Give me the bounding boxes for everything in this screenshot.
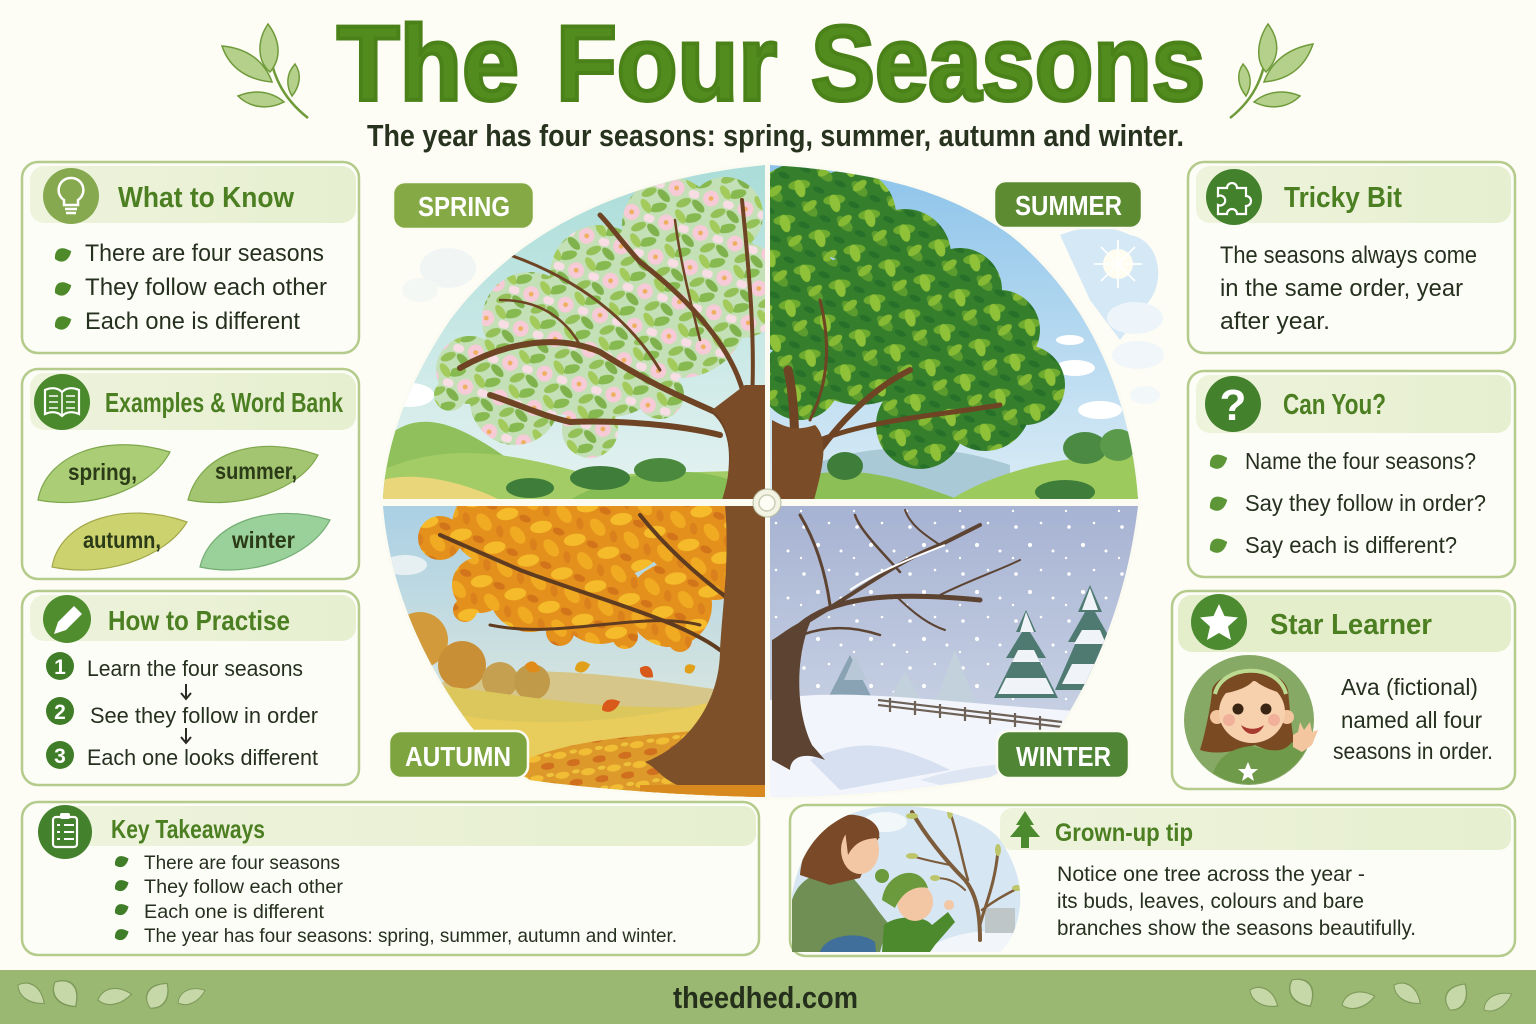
footer leaves right	[1247, 973, 1515, 1015]
label: winter: WINTER	[1016, 741, 1111, 772]
leaf pile	[524, 731, 760, 797]
icon: tree	[1010, 811, 1040, 848]
icon: right leaf sprig	[1230, 24, 1313, 118]
avatar: Ava	[1184, 655, 1318, 790]
word leaf: spring: spring,	[68, 459, 137, 485]
quadrant: autumn	[383, 506, 765, 797]
autumn canopy	[418, 506, 727, 652]
panel: can you	[1188, 371, 1515, 577]
icon: light bulb	[43, 168, 99, 224]
list: There are four seasons	[144, 853, 340, 874]
heading: How to Practise	[108, 605, 290, 636]
list	[52, 240, 327, 335]
decorative clouds and sun beside the seasons circle	[402, 228, 1164, 404]
list	[112, 853, 677, 947]
word leaf: spring	[38, 445, 170, 503]
icon: clipboard checklist	[38, 805, 92, 859]
list: Name the four seasons?	[1245, 448, 1476, 474]
quadrant: summer	[770, 165, 1138, 499]
heading: Tricky Bit	[1284, 182, 1402, 214]
footer band	[0, 970, 1536, 1024]
icon: question mark: ?	[1220, 381, 1246, 430]
white outline of wheel	[380, 162, 1141, 800]
body text: after year.	[1220, 308, 1330, 335]
list: They follow each other	[85, 274, 327, 301]
falling leaves	[525, 661, 696, 712]
heading: Star Learner	[1270, 609, 1432, 641]
list: Each one is different	[144, 902, 325, 923]
body text: Ava (fictional)	[1341, 674, 1478, 700]
step 3: 3	[54, 745, 66, 768]
icon: puzzle piece	[1206, 169, 1262, 225]
summer trunk and branches	[784, 298, 1002, 452]
body text: The seasons always come	[1220, 242, 1477, 269]
body text: seasons in order.	[1333, 738, 1493, 764]
title: Four	[556, 3, 777, 123]
title: Seasons	[811, 3, 1205, 123]
illustration: adult and child by a budding tree	[790, 805, 1025, 955]
word leaf: summer	[188, 446, 318, 503]
icon: star	[1191, 594, 1247, 650]
body text: Notice one tree across the year -	[1057, 863, 1365, 886]
panel: what to know	[22, 162, 359, 353]
label: autumn	[389, 731, 528, 778]
winter tree	[790, 510, 1020, 640]
adult	[792, 872, 890, 952]
seasons wheel	[380, 160, 1145, 802]
summer canopy	[770, 166, 1065, 469]
fir trees	[828, 585, 1125, 702]
label: winter	[997, 731, 1129, 778]
icon: pencil	[43, 595, 91, 643]
list: They follow each other	[144, 877, 344, 898]
arrow	[181, 728, 191, 743]
label: autumn: AUTUMN	[405, 741, 511, 772]
body text: in the same order, year	[1220, 275, 1463, 302]
snow field	[770, 694, 1070, 797]
step 2: See they follow in order	[90, 703, 318, 728]
icon: open book	[34, 374, 90, 430]
body text	[1220, 242, 1477, 335]
quadrant: spring	[380, 160, 788, 505]
spring trunk and branches	[460, 200, 753, 502]
center hub	[380, 162, 1141, 800]
icon: left leaf sprig	[222, 24, 308, 118]
body text: named all four	[1341, 707, 1482, 733]
footer leaves left	[14, 974, 208, 1013]
site name: theedhed.com	[673, 980, 858, 1015]
word leaf: summer: summer,	[215, 458, 297, 484]
heading: Examples & Word Bank	[105, 387, 343, 418]
panel: tricky bit	[1188, 162, 1515, 353]
body text: its buds, leaves, colours and bare	[1057, 890, 1364, 913]
label: summer: SUMMER	[1015, 190, 1122, 221]
label: spring: SPRING	[418, 191, 510, 222]
heading: What to Know	[118, 182, 294, 214]
panel: grown-up tip	[790, 805, 1515, 956]
list	[1207, 448, 1486, 558]
heading: Key Takeaways	[111, 814, 265, 844]
heading: Grown-up tip	[1055, 819, 1193, 847]
title	[337, 3, 1205, 123]
quadrant: winter	[765, 502, 1145, 802]
fence	[878, 698, 1062, 730]
title: The	[337, 3, 519, 123]
subtitle: The year has four seasons: spring, summer, autumn and winter.	[367, 118, 1184, 153]
step 3: Each one looks different	[87, 745, 318, 770]
panel: key takeaways	[22, 802, 759, 955]
step 1: Learn the four seasons	[87, 656, 303, 681]
panel: how to practise	[22, 591, 359, 785]
label: spring	[393, 182, 534, 229]
label: summer	[994, 181, 1142, 228]
list: Say each is different?	[1245, 532, 1457, 558]
word leaf: autumn: autumn,	[83, 527, 161, 553]
panel: star learner	[1172, 591, 1515, 790]
child	[882, 912, 955, 952]
arrow	[181, 684, 191, 699]
panel: examples and word bank	[22, 369, 359, 579]
list: There are four seasons	[85, 240, 324, 267]
word leaf: autumn	[52, 513, 187, 570]
list: Each one is different	[85, 308, 300, 335]
body text: branches show the seasons beautifully.	[1057, 917, 1416, 940]
body text	[1333, 674, 1493, 764]
step 1: 1	[54, 656, 66, 679]
list: Say they follow in order?	[1245, 490, 1486, 516]
autumn trunk and branches	[440, 515, 730, 650]
spring canopy	[434, 177, 788, 458]
step 2	[46, 697, 318, 728]
word leaf: winter	[200, 513, 330, 570]
body text	[1057, 863, 1416, 940]
icon: question mark	[1205, 376, 1261, 432]
step 2: 2	[54, 701, 66, 724]
word leaf: winter: winter	[231, 527, 295, 553]
list: The year has four seasons: spring, summer, autumn and winter.	[144, 926, 677, 947]
heading: Can You?	[1283, 389, 1386, 421]
